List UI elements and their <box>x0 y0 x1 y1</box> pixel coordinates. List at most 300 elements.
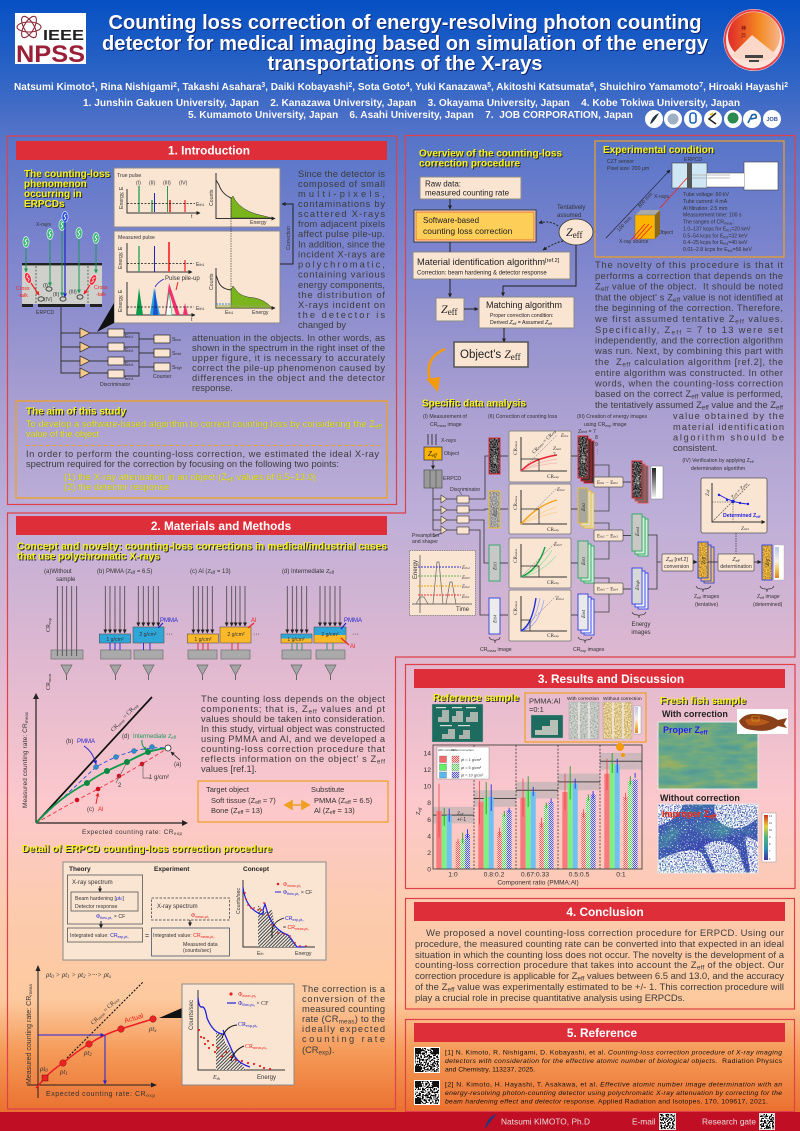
annotation: Zeff <box>457 811 464 817</box>
text: introduction right column: In addition, since the <box>298 240 385 250</box>
subtraction boxes: Eth1 − Eth2 <box>597 480 618 486</box>
text: novelty of the procedure: based on the correct Z <box>595 389 691 399</box>
inset: spectrum chart: E <box>213 1075 217 1081</box>
flow step: raw data: Raw data: <box>425 180 461 188</box>
conference logo <box>724 9 784 71</box>
text: correction description: ) to the <box>355 1014 385 1024</box>
figure: theory, experiment, concept: Integrated value: CR <box>153 933 201 939</box>
figure: true pulse: (II) <box>149 180 156 186</box>
text: novelty of the procedure: was run. Next, by combining this part with <box>594 346 783 356</box>
text: conclusion: of the object. Our <box>705 960 784 971</box>
inset: spectrum chart: CR <box>245 1044 253 1050</box>
Zeff tentative image stack: (tentative) <box>695 602 718 608</box>
colorbar: fish: 13 <box>769 814 772 818</box>
figure: ERPCD detector: -talk <box>96 292 106 298</box>
text: novelty of the procedure: value is not identified at <box>680 292 783 302</box>
logo: IEEE NPSS: IEEE <box>43 27 84 44</box>
arrow: correction: Correction <box>286 226 292 250</box>
text: correction description: ). <box>329 1045 334 1055</box>
chart: correction conversion: = CR <box>102 1000 116 1015</box>
figure: theory, experiment, concept: = CR <box>283 925 295 931</box>
callout: experimental condition: Experimental condition <box>603 145 714 156</box>
callout: target object and substitute: Bone (Z <box>211 806 238 815</box>
panel: Results and Discussion <box>406 664 795 888</box>
authors: 2 <box>173 81 177 89</box>
text: novelty of the procedure: eff <box>672 330 681 336</box>
chart: measured vs expected counting rate: Expected counting rate: CR <box>82 829 173 836</box>
CR-exp image stacks <box>573 429 605 653</box>
correction plot: Eth1: CRmeas = CRexp <box>531 429 558 455</box>
callout: PMMA:Al 0:1: Without correction <box>603 696 642 702</box>
figure: theory, experiment, concept: exp,ρt₀ <box>292 918 304 922</box>
callout: experimental condition: X-rays <box>654 194 669 200</box>
figure: object configurations: eff <box>211 570 216 575</box>
figure: object configurations: 1 g/cm² <box>287 637 305 643</box>
figure: readout circuit: Discriminator <box>100 382 131 388</box>
figure: measured pulse <box>114 231 280 323</box>
energy image stacks: Elow <box>635 475 641 485</box>
callout: experimental condition: th2 <box>723 236 728 240</box>
QR code: e-mail <box>659 1113 676 1130</box>
figure: ERPCD detector: (III) <box>69 290 77 296</box>
flow step: material identification: Material identification algorithm <box>417 257 545 267</box>
panel: Conclusion <box>406 898 794 1009</box>
callout: experimental condition: =56 keV <box>733 247 752 253</box>
chart: Zeff bar chart: 1:0 <box>448 872 458 878</box>
text: conclusion: We proposed a novel counting-loss correction procedure for ERPCD. Using our <box>426 928 784 939</box>
chart: correction conversion <box>26 965 182 1099</box>
callout: experimental condition: 0.5–54 kcps for E <box>683 234 723 240</box>
axes labels: 12 <box>423 767 431 774</box>
callout: experimental condition: 100 mm <box>616 216 633 233</box>
figure: theory, experiment, concept: Φ <box>283 882 287 888</box>
figure: readout circuit: Counter <box>153 374 172 380</box>
chart: measured vs expected counting rate: (a) <box>174 762 181 768</box>
figure: specific data analysis <box>410 414 784 653</box>
callout: experimental condition: 0.4–25 kcps for E <box>683 240 723 246</box>
subheading: concept and novelty: Concept and novelty: counting-loss corrections in medical/industrial cases <box>17 542 387 552</box>
callout: experimental condition <box>595 141 784 257</box>
figure: measured pulse: Eth1 <box>196 262 204 268</box>
figure: measured pulse: Eth1 <box>196 306 204 312</box>
CR-exp image stacks: Eth1 <box>581 454 587 463</box>
callout: experimental condition: th1 <box>726 228 731 232</box>
reference bands <box>433 753 642 823</box>
correction plot: Eth2: Eth2 <box>556 487 565 493</box>
figure: measured pulse: t <box>191 317 193 323</box>
figure: specific data analysis: image <box>446 422 462 428</box>
Zeff tentative image stack: Z <box>694 594 697 600</box>
callout: aim of this study: To develop a software-based algorithm to correct counting loss by considering the Z <box>26 419 375 429</box>
text: conclusion: counting-loss correction procedure that takes into account the Z <box>415 960 697 971</box>
CR-meas images: Eth3 <box>492 562 498 571</box>
flow step: matching algorithm: Matching algorithm <box>486 300 562 310</box>
text: novelty of the procedure: eff <box>601 286 609 293</box>
text: introduction right column: containing various <box>298 270 385 280</box>
text: introduction right column: affect pulse pile-up. <box>298 229 385 239</box>
verification chart: Determined Z <box>723 513 756 519</box>
heading: 5. Reference: 5. Reference <box>567 1026 638 1040</box>
callout: experimental condition: 800 mm <box>637 192 654 209</box>
panel: Materials and Methods <box>16 516 388 1099</box>
text: correction description: conversion of the <box>302 994 385 1004</box>
text: reference 1 <box>445 1050 783 1074</box>
text: counting loss explanation: values should be taken into consideration. <box>201 714 385 724</box>
flow step: software correction: counting loss correction <box>423 226 513 236</box>
callout: target object and substitute: Soft tissue (Z <box>211 796 255 805</box>
figure: object configurations: 2 g/cm² <box>139 632 157 638</box>
header band <box>14 9 788 128</box>
heatmap: improper Zeff <box>658 804 758 873</box>
figure: measured pulse: Energy, E <box>118 246 124 269</box>
heatmap: proper Zeff <box>658 722 758 789</box>
subheading: counting-loss phenomenon: ERPCDs <box>24 199 65 210</box>
figure: object configurations: exp <box>47 618 52 624</box>
text: reference 2: beam hardening effect and detector response. Applied Radiation and Isotopes. 170, 109617, 2021. <box>445 1098 768 1106</box>
step I: measurement: Preamplifier <box>412 533 440 539</box>
flow step: matching algorithm: eff <box>548 322 552 326</box>
figure: ERPCD detector: (I) <box>43 283 48 289</box>
figure: object configurations: sample <box>56 577 76 583</box>
text: novelty of the procedure: the beginning of the correction. Therefore, <box>595 303 783 313</box>
subtraction boxes <box>594 477 631 594</box>
inset: spectrum chart: Energy <box>257 1075 276 1081</box>
axes labels <box>423 750 431 874</box>
callout: target object and substitute: ≈ 13) <box>243 806 263 815</box>
step I: measurement: Discriminator <box>450 487 481 493</box>
panel frame: Introduction <box>8 136 396 504</box>
conference logo: 戸 <box>741 33 746 40</box>
figure: theory, experiment, concept: X-ray spectrum <box>72 880 113 886</box>
CR-exp image stacks: Eth3 <box>581 557 587 566</box>
chart: Zeff bar chart: 0.67:0.33 <box>521 872 549 878</box>
flow step: material identification: Correction: beam hardening & detector response <box>417 270 547 276</box>
callout: experimental condition: Tube current: 4 mA <box>683 199 728 205</box>
correction plot: Eth4: CRexp <box>547 633 559 639</box>
subheading: detail of correction procedure: Detail of ERPCD counting-loss correction procedure <box>22 844 272 855</box>
figure: object configurations: 1 g/cm² <box>194 637 212 643</box>
callout: target object and substitute: eff <box>345 800 351 806</box>
text: novelty of the procedure: value and the Z <box>709 400 776 410</box>
colorbar: energy image <box>651 466 663 499</box>
flow step: raw data: measured counting rate <box>425 188 510 198</box>
chart: measured vs expected counting rate: exp <box>132 703 139 711</box>
correction plot: Eth1: Ztent <box>553 446 562 452</box>
legend: ρt = 10 g/cm² <box>461 774 484 778</box>
chart: correction conversion: 1 <box>65 1072 68 1077</box>
callout: experimental condition: ERPCD <box>684 157 702 163</box>
text: correction description: ideally expected <box>302 1024 385 1034</box>
verification chart: eff <box>750 460 754 464</box>
wiring to Zeff conversion <box>648 535 661 589</box>
inset: spectrum chart: meas,ρtₓ <box>253 1045 268 1051</box>
CR-exp image stacks: Ztent = 7 <box>578 429 596 435</box>
text: conclusion: values between 6.5 and 13.0, and the accuracy <box>584 971 784 982</box>
step I: measurement: Z <box>428 450 432 458</box>
figure: true pulse: t <box>191 214 193 220</box>
energy threshold graph: Time <box>456 607 470 613</box>
correction plot: Eth2: CRmeas <box>513 495 519 510</box>
text: conclusion: eff <box>577 976 585 982</box>
title: Counting loss correction of energy-resolving photon counting <box>108 12 702 34</box>
figure: ERPCD detector: Cross <box>16 286 30 292</box>
flow step: object's Zeff <box>454 342 528 367</box>
legend: Without correction <box>451 748 474 752</box>
chart: measured vs expected counting rate: 2 <box>118 783 122 789</box>
panel: Introduction <box>16 141 387 498</box>
inset: spectrum chart: th <box>217 1076 220 1081</box>
photo: fish <box>737 709 788 734</box>
correction plot: Eth3: CRexp <box>547 580 559 586</box>
chart: measured vs expected counting rate: Al <box>98 807 103 813</box>
figure: theory, experiment, concept: Eth <box>257 951 263 957</box>
inset: spectrum chart: Φ <box>238 1001 256 1008</box>
CR-meas images: meas <box>488 649 496 653</box>
text: novelty of the procedure: value of the object. It should be noted <box>609 282 783 292</box>
CR-meas images: Eth4 <box>492 615 498 624</box>
step I: measurement: and shaper <box>412 539 438 545</box>
Zeff determined image: image <box>764 594 780 600</box>
text: introduction right column: upper figure, it is necessary to accurately <box>192 353 385 363</box>
correction plot: Eth1: Eth1 <box>560 433 569 439</box>
correction plot: Eth1: CRexp <box>547 474 559 480</box>
text: novelty of the procedure: algorithm should be <box>673 432 784 442</box>
text: introduction right column: polychromatic, <box>298 260 385 270</box>
heading: 4. Conclusion: 4. Conclusion <box>566 905 644 919</box>
figure: object configurations: CR <box>46 624 52 632</box>
text: introduction right column: changed by <box>298 320 346 330</box>
text: novelty of the procedure: that the object' s Z <box>595 292 673 302</box>
flow step: Zeff ellipse <box>557 205 593 245</box>
text: reference 2: [2] N. Kimoto, H. Hayashi, T. Asakawa, et al. Effective atomic number image determination with an <box>445 1082 782 1088</box>
correction plot: Eth4 <box>509 590 571 641</box>
chart: Zeff bar chart: 0.5:0.5 <box>569 872 590 878</box>
chart: measured vs expected counting rate: eff <box>171 735 177 740</box>
chart: correction conversion: 2 <box>83 975 86 980</box>
figure: object configurations: 1 g/cm² <box>106 637 124 643</box>
chart: correction conversion: 0 <box>51 975 54 980</box>
flow step: software correction: Software-based <box>423 216 479 225</box>
figure: readout circuit: Eth1 <box>125 334 133 340</box>
callout: aim of this study <box>16 401 387 498</box>
affiliation logos <box>645 110 781 128</box>
axes labels: 14 <box>423 750 431 757</box>
text: introduction right column: X-rays incident on <box>298 300 385 310</box>
callout: experimental condition: =32 keV <box>728 234 748 240</box>
Zeff tentative image stack <box>694 542 720 608</box>
figure: measured pulse: Energy <box>252 310 269 316</box>
affiliations: 1. Junshin Gakuen University, Japan 2. Kanazawa University, Japan 3. Okayama University, Japan 4. Kobe Tokiwa University, Japan <box>83 97 740 109</box>
text: counting loss explanation: reflects information on the object' s Z <box>201 754 376 764</box>
chart: measured vs expected counting rate: Measured counting rate: CR <box>22 723 29 808</box>
title <box>102 12 709 75</box>
text: conclusion: situation in which the counting loss does not occur. The novelty is the development of a <box>415 950 785 961</box>
flow step: software correction <box>414 210 536 242</box>
figure: theory, experiment, concept: meas,ρt₀ <box>287 884 302 888</box>
figure: theory, experiment, concept: (counts/sec) <box>183 948 212 954</box>
colorbar: fish: 9 <box>769 835 771 839</box>
figure: theory, experiment, concept: Concept <box>243 866 270 873</box>
verification chart: determination algorithm <box>691 466 745 472</box>
correction plot: Eth2 <box>509 484 571 534</box>
footer bar <box>0 1112 800 1131</box>
text: reference 1: [1] N. Kimoto, R. Nishigami, D. Kobayashi, et al. Counting-loss correction procedure of X-ray imaging <box>445 1050 782 1056</box>
figure: object configurations: PMMA <box>344 618 362 624</box>
icon: feather logo <box>485 1114 496 1128</box>
inset: spectrum chart: exp,ρtₓ <box>246 1023 258 1029</box>
figure: theory, experiment, concept: = <box>145 933 149 940</box>
subheading: concept and novelty <box>17 542 387 562</box>
legend: With correction <box>438 748 457 752</box>
figure: theory, experiment, concept <box>63 862 326 960</box>
callout: aim of this study: eff <box>375 424 382 430</box>
figure: theory, experiment, concept: Beam hardening [ρt0] <box>75 896 124 902</box>
callout: aim of this study: spectrum required for the correction by focusing on the following two points: <box>26 459 339 469</box>
figure: true pulse: (IV) <box>179 180 188 186</box>
callout: PMMA:Al 0:1 <box>525 693 646 742</box>
CR-meas images <box>480 438 512 653</box>
text: novelty of the procedure: the Z <box>595 357 622 367</box>
text: novelty of the procedure: performs a correction that depends on the <box>595 271 783 281</box>
text: correction description: exp <box>319 1050 329 1056</box>
subheading: counting-loss phenomenon <box>24 169 111 210</box>
text: correction description: (CR <box>302 1045 319 1055</box>
callout: target object and substitute: eff <box>330 810 336 816</box>
flow step: Zeff box: Z <box>441 302 448 316</box>
figure: readout circuit: Eth2 <box>125 348 133 354</box>
text: introduction right column: differences in the object and the detector <box>192 373 385 383</box>
figure: specific data analysis: using CR <box>584 422 605 428</box>
chart: correction conversion: 2 <box>89 1053 92 1058</box>
figure: theory, experiment, concept: meas,ρt₀ <box>195 915 210 919</box>
text: introduction right column: incident X-rays are <box>298 250 385 260</box>
figure: theory, experiment, concept: CR <box>285 916 292 922</box>
callout: target object and substitute: eff <box>255 800 261 806</box>
callout: experimental condition: Measurement time: 100 s <box>683 212 742 218</box>
subheading: reference sample: Reference sample <box>433 693 519 704</box>
energy image stacks: Energy <box>631 622 651 628</box>
CR-exp image stacks: Eth2 <box>581 503 587 512</box>
QR code: research gate <box>759 1113 775 1130</box>
figure: object configurations: PMMA <box>160 618 178 624</box>
Zeff determined image: (determined) <box>753 602 783 608</box>
figure: measured pulse: Eth1 <box>225 310 233 316</box>
heading: 1. Introduction: 1. Introduction <box>168 144 250 158</box>
text: counting loss explanation: using PMMA and Al, and we developed a <box>201 734 386 744</box>
authors: , Sota Goto <box>352 81 406 93</box>
text: conclusion: procedure, the measured counting rate can be converted into that expected in an ideal <box>415 939 784 950</box>
text: correction description: The correction is a <box>302 984 386 994</box>
energy image stacks: Emid <box>635 527 641 537</box>
flow step: object's Zeff: Object's Z <box>460 349 511 361</box>
text: conclusion: value was experimentally estimated to be +/- 1. This correction procedure will <box>455 982 784 993</box>
flow step: Zeff ellipse: Tentatively <box>557 205 585 211</box>
wiring between stacks and subtraction <box>594 465 609 612</box>
chart: measured vs expected counting rate <box>22 693 188 836</box>
chart: measured vs expected counting rate: PMMA <box>77 739 95 745</box>
text: counting loss explanation <box>201 694 386 774</box>
text: novelty of the procedure: independently, and the correction algorithm <box>595 336 783 346</box>
chart: correction conversion: Expected counting rate: CR <box>46 1091 146 1098</box>
figure: theory, experiment, concept: theo,ρt₀ <box>287 892 300 896</box>
chart: correction conversion: meas <box>29 983 34 996</box>
figure: true pulse: Energy, E <box>119 186 125 209</box>
text: reference 1: detectors with consideration for the effective atomic number of biological objects. Radiation Physics <box>445 1058 783 1065</box>
chart: correction conversion: meas <box>97 1011 106 1021</box>
figure: theory, experiment, concept: Theory <box>69 866 91 873</box>
chart: measured vs expected counting rate: CR <box>110 723 120 733</box>
chart: Zeff bar chart: 0:1 <box>616 872 626 878</box>
chart: correction conversion: ρt <box>84 1049 89 1057</box>
callout: target object and substitute: eff <box>238 810 244 816</box>
text: conclusion: eff <box>697 964 705 972</box>
chart: correction conversion: ρt <box>60 1068 65 1076</box>
authors: 4 <box>406 81 410 89</box>
callout: PMMA:Al 0:1: With correction <box>567 696 599 702</box>
figure: true pulse: (I) <box>136 180 141 186</box>
text: novelty of the procedure: the tentatively assumed Z <box>595 400 702 410</box>
flow step: material identification: [ref.2] <box>545 258 560 264</box>
chart: measured vs expected counting rate: exp <box>174 831 183 836</box>
flow step: raw data <box>420 177 521 199</box>
callout: target object and substitute <box>198 781 388 822</box>
Zeff conversion box: conversion <box>664 564 689 570</box>
chart: measured vs expected counting rate: meas <box>116 718 126 728</box>
text: introduction right column: the distribution of <box>298 290 385 300</box>
callout: target object and substitute: Substitute <box>311 785 344 794</box>
chart: correction conversion: > ρt <box>54 971 68 979</box>
callout: experimental condition: th3 <box>723 242 728 246</box>
subheading: fresh fish sample: Fresh fish sample <box>660 696 746 707</box>
heading: 1. Introduction <box>16 141 387 160</box>
figure: object configurations: ··· <box>166 631 173 638</box>
plot frame <box>433 745 642 869</box>
Zeff determined image: Zeff <box>765 558 771 566</box>
conference logo: 神 <box>741 25 746 32</box>
CR-meas images: Eth1 <box>492 455 498 464</box>
step I: measurement <box>412 434 481 545</box>
callout: target object and substitute: ≈ 7) <box>261 796 276 805</box>
colorbar: fish: 10 <box>769 828 772 832</box>
arrow: to specific data analysis <box>426 349 445 392</box>
callout: experimental condition: meas <box>724 222 733 226</box>
energy threshold graph: Energy <box>413 560 419 579</box>
chart: correction conversion: 1 <box>67 975 70 980</box>
subheading: overview <box>419 148 562 170</box>
Zeff tentative image stack: Zeff <box>701 556 707 564</box>
authors: 2 <box>348 81 352 89</box>
CR-exp image stacks: images <box>586 647 605 653</box>
text: novelty of the procedure: eff <box>622 362 631 368</box>
figure: specific data analysis: meas <box>438 424 446 428</box>
correction plot: Eth1: 7 <box>553 452 556 458</box>
CR-meas images: image <box>496 647 512 653</box>
text: conclusion <box>415 928 785 1004</box>
callout: experimental condition: CZT sensor <box>607 159 634 165</box>
CR-exp image stacks: CR <box>573 647 580 653</box>
energy image stacks: images <box>631 630 651 636</box>
Zeff conversion box: eff <box>669 559 674 563</box>
text: introduction right column: contaminations by <box>298 199 385 209</box>
flow step: Zeff box <box>436 298 464 321</box>
figure: object configurations: (d) Intermediate Z <box>282 569 329 575</box>
text: introduction right column: multi-pixels, <box>298 189 385 199</box>
heading: 5. Reference <box>414 1023 785 1042</box>
text: novelty of the procedure: Z <box>595 282 601 292</box>
QR code: reference 1 <box>414 1047 440 1073</box>
figure: readout circuit: Eth3 <box>125 362 133 368</box>
Zeff conversion box: [ref.2] <box>673 557 688 563</box>
